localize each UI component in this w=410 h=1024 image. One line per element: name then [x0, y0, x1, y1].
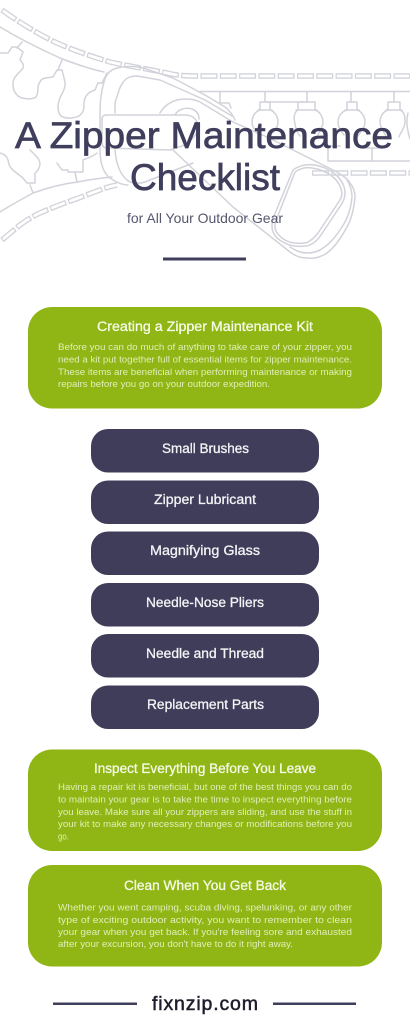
panel: clean when back: your gear when you get back. If you're feeling sore and exhausted — [58, 927, 352, 938]
footer website: fixnzip.com — [152, 993, 258, 1015]
panel: creating a kit: Before you can do much of anything to take care of your zipper, you — [58, 342, 352, 353]
item: magnifying glass: Magnifying Glass — [150, 543, 260, 558]
item: needle and thread — [91, 634, 319, 678]
panel: creating a kit: Creating a Zipper Maintenance Kit — [97, 319, 313, 334]
panel: inspect everything: your kit to make any necessary changes or modifications before you — [58, 819, 352, 830]
item: magnifying glass — [91, 532, 319, 575]
item: small brushes: Small Brushes — [162, 441, 249, 456]
title — [15, 115, 393, 198]
panel: inspect everything: go. — [58, 832, 69, 842]
panel: inspect everything: Inspect Everything Before You Leave — [94, 761, 316, 776]
zipper line illustration — [0, 10, 410, 258]
panel: clean when back: after your excursion, you don't have to do it right away. — [58, 939, 293, 950]
item: small brushes — [91, 429, 319, 472]
panel: clean when back: Whether you went camping, scuba diving, spelunking, or any other — [58, 902, 353, 914]
title rule — [163, 258, 246, 260]
panel: creating a kit — [28, 307, 382, 408]
panel: inspect everything: you leave. Make sure all your zippers are sliding, and use the stuff in — [58, 807, 352, 818]
item: zipper lubricant — [91, 480, 319, 524]
panel: creating a kit: These items are beneficial when performing maintenance or making — [58, 367, 352, 378]
item: zipper lubricant: Zipper Lubricant — [154, 492, 256, 507]
item: replacement parts — [91, 686, 319, 729]
panel: clean when back: Clean When You Get Back — [124, 878, 286, 893]
panel: creating a kit: need a kit put together full of essential items for zipper maintenance. — [58, 354, 352, 366]
title: A Zipper Maintenance — [15, 115, 393, 156]
panel: inspect everything: Having a repair kit is beneficial, but one of the best things you can do — [58, 782, 352, 793]
item: needle-nose pliers: Needle-Nose Pliers — [146, 595, 264, 610]
item: replacement parts: Replacement Parts — [147, 697, 264, 712]
item: needle and thread: Needle and Thread — [146, 646, 264, 661]
subtitle: for All Your Outdoor Gear — [127, 210, 283, 226]
panel: creating a kit: repairs before you go on your outdoor expedition. — [58, 379, 270, 390]
panel: inspect everything: to maintain your gear is to take the time to inspect everything before — [58, 794, 352, 806]
panel: clean when back: type of exciting outdoor activity, you want to remember to clean — [58, 915, 352, 926]
item: needle-nose pliers — [91, 583, 319, 626]
panel: inspect everything — [28, 750, 382, 851]
title: Checklist — [130, 157, 281, 198]
panel: clean when back — [28, 865, 382, 966]
